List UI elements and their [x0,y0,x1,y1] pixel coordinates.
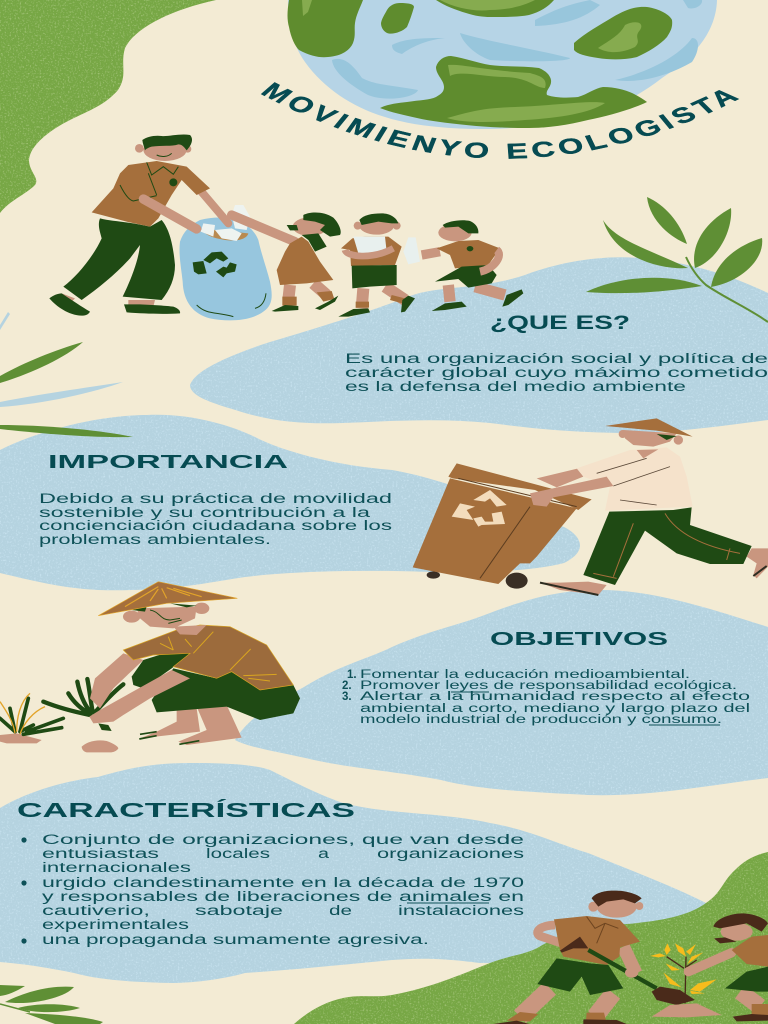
text: caracteristicas list: de [329,903,352,918]
green corner shape top left [0,0,216,213]
text: caracteristicas list: cautiverio, [42,903,150,918]
text: objetivos list: ambiental a corto, mediano y largo plazo del [360,703,750,715]
panel: importancia blob [0,415,580,590]
panel: objetivos blob [235,590,768,795]
feet [747,548,768,578]
arm to bag and shirt [200,190,228,223]
text: que es [345,351,768,394]
heading: importancia: IMPORTANCIA [48,452,288,472]
text: caracteristicas list: Conjunto de organizaciones, que van desde [42,832,524,847]
heading: objetivos: OBJETIVOS [490,629,668,649]
text: importancia: concienciación ciudadana sobre los [39,518,392,533]
front arm [89,670,190,723]
icon: leaves bottom left [0,985,103,1024]
illustration: crouching man planting [0,582,300,752]
heading: que es: ¿QUE ES? [490,313,630,334]
text: objetivos list: Alertar a la humanidad respecto al efecto [360,691,750,703]
icon: globe [288,0,717,129]
boy with bottles [338,213,415,317]
icon: bamboo leaves left [0,312,133,437]
title: MOVIMIENYO ECOLOGISTA [260,82,740,159]
illustration: kids recycling [232,213,523,317]
text: objetivos list: 3. [342,691,352,703]
illustration: sapling [650,943,722,1017]
icon: leaf branch top right [586,197,768,322]
plant right [43,679,123,715]
text: importancia: Debido a su práctica de movilidad [39,491,392,506]
stone [82,740,118,752]
text: caracteristicas list: locales [206,846,270,861]
shirt [123,625,293,690]
text: objetivos list: 2. [342,680,352,692]
legs [140,705,242,745]
back arm [90,653,143,708]
icon: recycle on bin [452,490,507,527]
text: importancia: problemas ambientales. [39,532,271,547]
heading: caracteristicas: CARACTERÍSTICAS [17,799,355,822]
text: objetivos list: Fomentar la educación medioambiental. [360,669,690,681]
lower arm [530,477,613,507]
panel: que es blob [190,257,768,433]
text: caracteristicas list: a [318,846,330,861]
man legs [49,218,180,316]
upper arm [537,468,583,487]
illustration: girl helping [688,913,768,1021]
text: caracteristicas list: sabotaje [195,903,283,918]
head and hat [619,430,627,438]
text: importancia: sostenible y su contribución a la [39,505,371,520]
panel: caracteristicas blob [0,763,706,983]
illustration: boy digging [493,891,695,1024]
text: objetivos list: modelo industrial de producción y consumo. [360,714,722,726]
text: caracteristicas list: instalaciones [398,903,524,918]
shirt [577,447,693,511]
text: objetivos list [342,669,750,726]
pants [132,652,190,688]
text: caracteristicas list: internacionales [42,860,191,875]
text: que es: Es una organización social y política de [345,351,768,366]
running boy [403,220,523,311]
bin [413,463,592,589]
text: objetivos list: Promover leyes de responsabilidad ecológica. [360,680,737,692]
head and hat [123,611,140,623]
text: que es: es la defensa del medio ambiente [345,379,686,394]
girl [232,213,341,312]
recycling bag [180,205,272,320]
text: importancia [39,491,392,547]
green hill bottom right [294,852,768,1024]
text: caracteristicas list: organizaciones [377,846,524,861]
icon: recycle on bag [193,252,237,277]
illustration: man pushing bin [413,418,768,595]
text: caracteristicas list: urgido clandestinamente en la década de 1970 [42,875,524,890]
text: caracteristicas list: una propaganda sumamente agresiva. [42,932,429,947]
text: caracteristicas list: y responsables de liberaciones de animales en [42,889,524,904]
pants [583,507,752,585]
text: que es: carácter global cuyo máximo cometido [345,365,768,380]
plant left [0,693,63,743]
illustration: man with bag [49,135,272,320]
text: objetivos list: 1. [347,669,357,681]
text: caracteristicas list [21,832,524,947]
man head [135,135,192,161]
text: caracteristicas list: experimentales [42,917,189,932]
text: caracteristicas list: entusiastas [42,846,159,861]
